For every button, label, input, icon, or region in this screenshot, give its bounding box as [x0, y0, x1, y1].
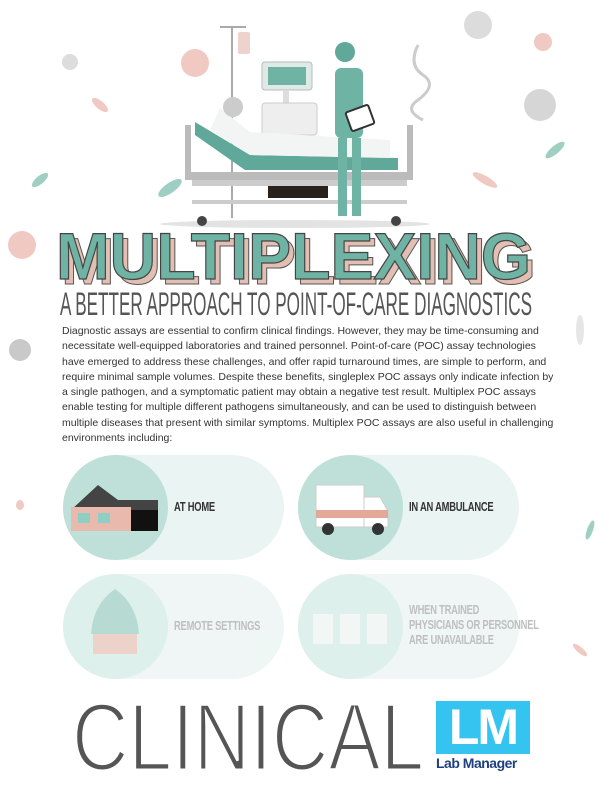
label: REMOTE SETTINGS: [174, 618, 260, 633]
hero illustration: hospital bed with patient and nurse: [160, 26, 430, 228]
label: [409, 602, 539, 647]
panel: in an ambulance: [298, 455, 519, 560]
intro text block: Diagnostic assays are essential to confirm clinical findings. However, they may be time-consuming and necessitate well-equipped laboratories and trained personnel. Point-of-care (POC) assay technologies have emerged to address these challenges, and offer rapid turnaround times, are simple to perform, and require minimal sample volumes. Despite these benefits, singleplex POC assays only indicate infection by a single pathogen, and a symptomatic patient may obtain a negative test result. Multiplex POC assays enable testing for multiple different pathogens simultaneously, and can be used to distinguish between multiple diseases that present with similar symptoms. Multiplex POC assays are also useful in challenging environments including:: [62, 325, 553, 444]
panel: at home: [63, 455, 284, 560]
icon: ambulance: [298, 455, 403, 560]
panel: unavailable personnel: [298, 574, 519, 679]
footer logo: Lab Manager: [436, 699, 530, 771]
footer logo: Lab Manager: LM: [449, 699, 517, 755]
label: WHEN TRAINED: [409, 602, 479, 617]
label: AT HOME: [174, 499, 215, 514]
icon: chairs: [298, 574, 403, 679]
footer logo: Lab Manager: Lab Manager: [436, 755, 517, 771]
icon: house: [63, 455, 168, 560]
label: PHYSICIANS OR PERSONNEL: [409, 617, 539, 632]
panel: remote settings: [63, 574, 284, 679]
label: IN AN AMBULANCE: [409, 499, 493, 514]
label: ARE UNAVAILABLE: [409, 632, 494, 647]
icon: hut: [63, 574, 168, 679]
